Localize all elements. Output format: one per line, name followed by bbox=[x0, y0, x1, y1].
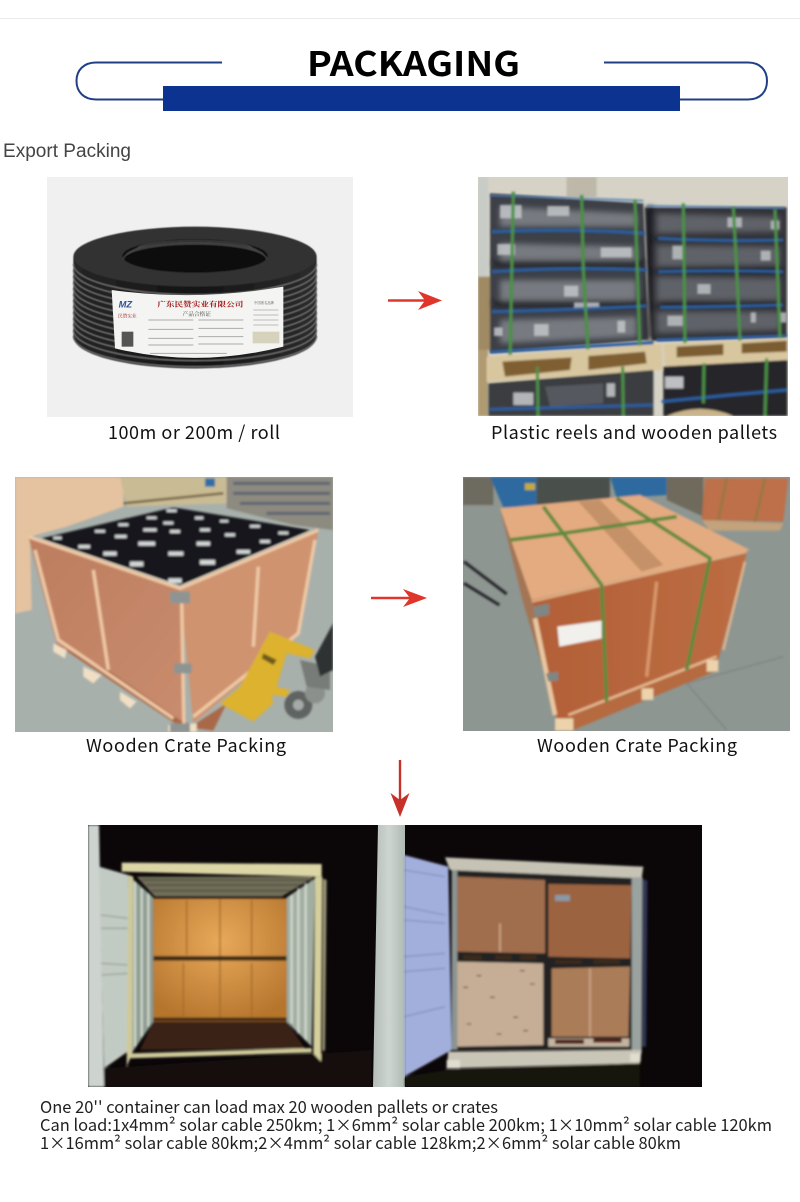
pallet bbox=[555, 658, 718, 730]
right pallet stack bbox=[645, 207, 787, 341]
arrow: down to container bbox=[390, 760, 410, 817]
background crate bbox=[702, 478, 788, 522]
metal corners bbox=[533, 603, 558, 682]
floor rods bbox=[464, 562, 507, 605]
plastic wrap sheen bbox=[493, 207, 780, 343]
pallets bbox=[487, 344, 663, 382]
pallet under crate bbox=[55, 643, 227, 731]
loading notes bbox=[40, 1094, 772, 1154]
note line 2: Can load:1x4mm² solar cable 250km; 1×6mm² solar cable 200km; 1×10mm² solar cable 120km bbox=[40, 1112, 772, 1136]
caption: reels: Plastic reels and wooden pallets bbox=[491, 419, 777, 445]
crate right face bbox=[180, 530, 318, 723]
crate left face bbox=[28, 537, 183, 727]
caption: crate left: Wooden Crate Packing bbox=[86, 732, 286, 758]
photo: cable coil bbox=[47, 177, 353, 417]
header banner bbox=[76, 37, 767, 111]
product label: 民赞实业 bbox=[118, 312, 137, 319]
caption: roll: 100m or 200m / roll bbox=[108, 419, 280, 445]
photo: loaded containers bbox=[88, 825, 702, 1087]
photo: plastic reels on wooden pallets bbox=[478, 177, 788, 416]
container: rear view of crates bbox=[88, 825, 371, 1087]
crate frame boards bbox=[28, 530, 318, 727]
shipping label bbox=[557, 621, 602, 647]
product label: MZ bbox=[119, 299, 132, 309]
green straps bbox=[510, 498, 710, 702]
lid bbox=[500, 495, 750, 600]
product label bbox=[112, 287, 283, 358]
product label: 中国著名品牌 bbox=[254, 300, 275, 305]
blue straps bbox=[490, 230, 787, 352]
arrow: crate to closed crate bbox=[371, 589, 427, 607]
note line 1: One 20'' container can load max 20 wooden pallets or crates bbox=[40, 1094, 498, 1118]
black cable rolls bbox=[42, 507, 310, 585]
lower row of cable bbox=[488, 370, 653, 416]
photo: open wooden crate with cable rolls bbox=[15, 477, 333, 732]
container pillar bbox=[373, 825, 405, 1087]
section heading: Export Packing: Export Packing bbox=[3, 141, 131, 162]
title: PACKAGING bbox=[307, 37, 520, 86]
left edge bbox=[500, 508, 557, 718]
photo: closed wooden crate with green straps bbox=[463, 477, 790, 731]
front face bbox=[532, 553, 747, 718]
product label: 产品合格证 bbox=[183, 309, 211, 318]
note line 3: 1×16mm² solar cable 80km;2×4mm² solar cable 128km;2×6mm² solar cable 80km bbox=[40, 1130, 681, 1154]
caption: crate right: Wooden Crate Packing bbox=[537, 732, 737, 758]
container: front view of crates bbox=[403, 854, 649, 1087]
product label: 广东民赞实业有限公司 bbox=[157, 300, 243, 310]
left pallet stack bbox=[490, 193, 648, 353]
pallet jack bbox=[284, 691, 312, 719]
green straps bbox=[510, 192, 780, 362]
metal corners bbox=[170, 592, 192, 732]
arrow: coil to pallets bbox=[388, 291, 442, 310]
